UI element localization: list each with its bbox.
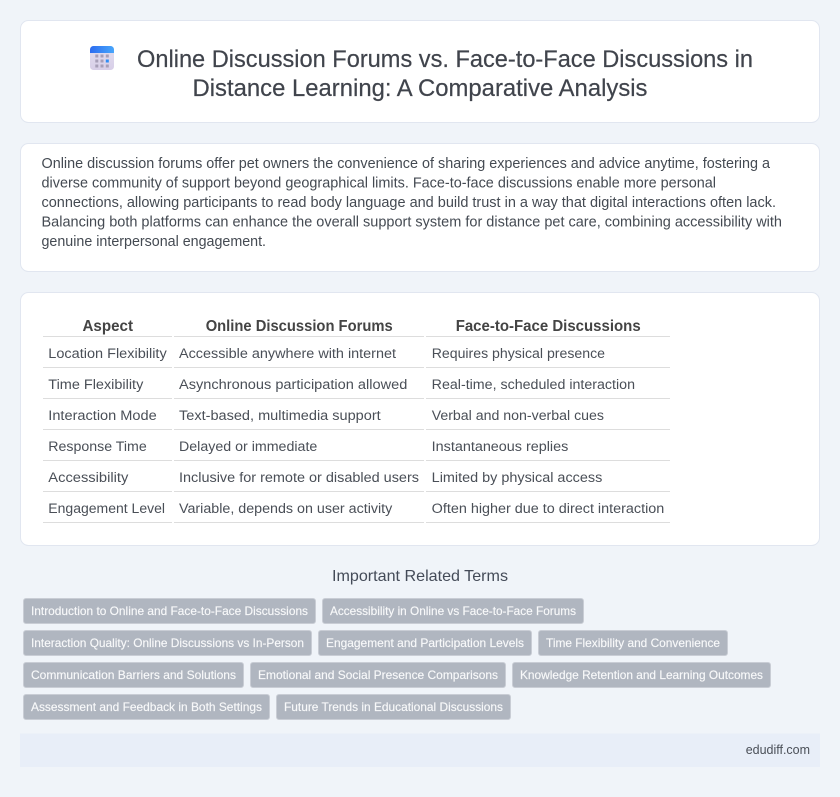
tag <box>24 694 270 720</box>
row: interaction mode: Interaction Mode <box>48 408 157 424</box>
tag <box>538 630 728 656</box>
description text: diverse community of support beyond geographical limits. Face-to-face discussions enable more personal <box>42 176 716 192</box>
row: time flexibility: Asynchronous participation allowed <box>179 377 407 393</box>
title <box>137 46 753 102</box>
title: Distance Learning: A Comparative Analysis <box>192 75 648 102</box>
row: engagement level: Variable, depends on user activity <box>179 501 393 517</box>
tag <box>24 630 312 656</box>
row: response time: Response Time <box>48 439 147 455</box>
table header: Aspect <box>82 318 133 335</box>
row: accessibility: Inclusive for remote or disabled users <box>179 470 419 486</box>
related terms tags <box>24 598 770 720</box>
description text: genuine interpersonal engagement. <box>42 234 266 250</box>
icon: calendar <box>90 46 114 70</box>
row: time flexibility: Time Flexibility <box>48 377 144 393</box>
tag: Communication Barriers and Solutions <box>31 668 236 682</box>
row: response time: Instantaneous replies <box>432 439 568 455</box>
title: Online Discussion Forums vs. Face-to-Face Discussions in <box>137 46 753 73</box>
tag: Accessibility in Online vs Face-to-Face Forums <box>330 604 576 618</box>
row: interaction mode: Verbal and non-verbal cues <box>432 408 604 424</box>
related terms heading: Important Related Terms <box>332 568 508 585</box>
tag: Emotional and Social Presence Comparisons <box>258 668 498 682</box>
row: response time: Delayed or immediate <box>179 439 317 455</box>
table header: Face-to-Face Discussions <box>456 318 641 335</box>
row: accessibility: Limited by physical access <box>432 470 602 486</box>
header panel <box>20 20 820 122</box>
row: engagement level: Often higher due to direct interaction <box>432 501 664 517</box>
footer source text: edudiff.com <box>746 742 810 757</box>
tag: Engagement and Participation Levels <box>326 636 524 650</box>
tag <box>24 662 244 688</box>
row: location flexibility: Accessible anywhere with internet <box>179 346 396 362</box>
row: interaction mode <box>43 408 670 430</box>
tag <box>250 662 506 688</box>
row: interaction mode: Text-based, multimedia support <box>179 408 381 424</box>
row: response time <box>43 439 670 460</box>
tag: Introduction to Online and Face-to-Face Discussions <box>31 604 308 618</box>
row: accessibility: Accessibility <box>48 470 129 486</box>
tag: Future Trends in Educational Discussions <box>284 700 503 714</box>
row: location flexibility <box>43 346 670 368</box>
tag <box>24 598 316 624</box>
row: accessibility <box>43 470 670 492</box>
tag: Knowledge Retention and Learning Outcomes <box>520 668 763 682</box>
comparison table panel <box>20 292 820 546</box>
tag <box>318 630 532 656</box>
tag: Interaction Quality: Online Discussions vs In-Person <box>31 636 304 650</box>
tag <box>512 662 770 688</box>
description text <box>42 156 782 250</box>
row: engagement level <box>43 501 670 522</box>
tag <box>276 694 510 720</box>
tag: Time Flexibility and Convenience <box>546 636 720 650</box>
description text: connections, allowing participants to read body language and build trust in a way that digital interactions often lack. <box>42 195 776 211</box>
row: location flexibility: Requires physical presence <box>432 346 605 362</box>
tag <box>322 598 584 624</box>
description text: Balancing both platforms can enhance the overall support system for distance pet care, combining accessibility with <box>42 214 782 230</box>
row: time flexibility <box>43 377 670 398</box>
row: time flexibility: Real-time, scheduled interaction <box>432 377 635 393</box>
table header: Online Discussion Forums <box>206 318 393 335</box>
description text: Online discussion forums offer pet owners the convenience of sharing experiences and advice anytime, fostering a <box>42 156 770 172</box>
row: location flexibility: Location Flexibility <box>48 346 168 362</box>
description panel <box>20 144 820 272</box>
tag: Assessment and Feedback in Both Settings <box>31 700 262 714</box>
row: engagement level: Engagement Level <box>48 501 165 517</box>
footer <box>20 734 820 767</box>
table header <box>43 318 670 336</box>
